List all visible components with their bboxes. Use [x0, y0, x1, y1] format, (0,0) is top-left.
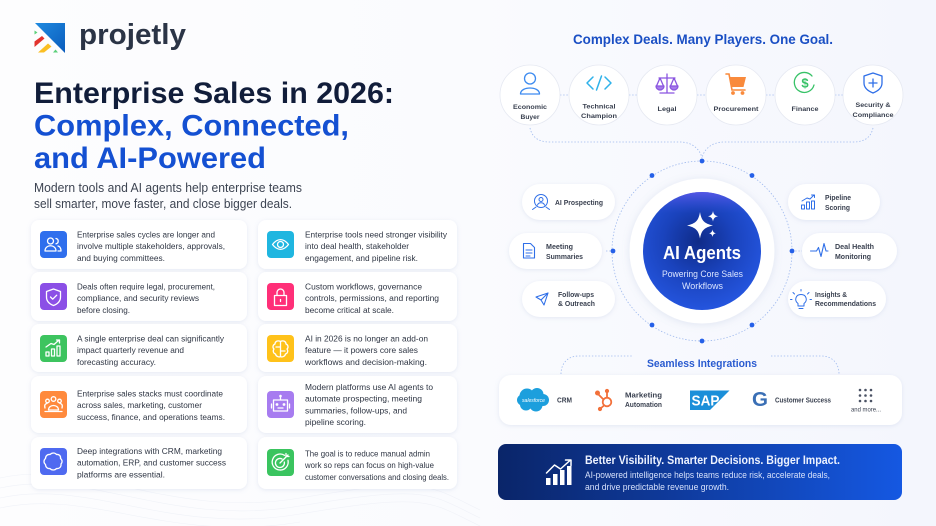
icon: shield plus	[864, 73, 882, 93]
card: integrations: Deep integrations with CRM, marketing	[77, 446, 222, 456]
logo: salesforce	[517, 388, 549, 412]
pill: deal health	[802, 233, 897, 269]
icon: sparkles	[687, 211, 718, 238]
card: goal: work so reps can focus on high-value	[304, 460, 434, 470]
panel: integrations: Automation	[625, 402, 662, 409]
pill: AI prospecting: AI Prospecting	[555, 200, 603, 207]
icon: document	[524, 244, 534, 258]
connector: stakeholders to AI agents	[530, 95, 873, 158]
logo: projetly: projetly	[79, 19, 186, 51]
title: Complex, Connected,	[34, 110, 349, 142]
heading: seamless integrations: Seamless Integrations	[647, 358, 757, 370]
card: sales stacks: success, finance, and operations teams.	[77, 412, 225, 422]
icon: cart	[726, 74, 746, 95]
card: legal reviews	[31, 272, 247, 321]
card: modern platforms: automate prospecting, meeting	[305, 394, 422, 404]
stakeholder: finance: Finance	[792, 106, 819, 113]
pill: follow-ups	[522, 281, 615, 317]
stakeholder: security and compliance: Security &	[856, 102, 891, 109]
banner: better visibility: and drive predictable revenue growth.	[585, 482, 729, 492]
more integrations: and more...	[851, 408, 881, 414]
icon: dollar: $	[801, 76, 809, 90]
icon: pulse	[810, 244, 828, 256]
card: AI core: feature — it powers core sales	[305, 345, 418, 355]
pill: AI prospecting	[522, 184, 615, 220]
icon: shield	[40, 283, 67, 310]
card: goal	[258, 437, 457, 489]
panel: integrations: CRM	[557, 398, 572, 404]
icon: robot	[267, 391, 294, 418]
more integrations	[851, 389, 881, 414]
pill: deal health: Deal Health	[835, 244, 874, 251]
icon: scales	[656, 74, 678, 93]
pill: pipeline scoring: Scoring	[825, 205, 850, 212]
card: deal impact: impact quarterly revenue and	[77, 345, 184, 355]
stakeholder: finance	[775, 65, 835, 125]
title: and AI-Powered	[34, 142, 266, 175]
icon: code	[587, 76, 611, 90]
logo: SAP: SAP	[692, 394, 720, 410]
hub: AI agents: AI Agents	[663, 242, 741, 263]
stakeholder: technical champion: Champion	[581, 113, 617, 120]
pill: meeting summaries: Meeting	[546, 244, 573, 251]
pill: insights: Recommendations	[815, 301, 876, 308]
card: deal impact: A single enterprise deal can significantly	[77, 334, 225, 344]
card: AI core: AI in 2026 is no longer an add-on	[305, 334, 428, 344]
card: deal impact	[31, 324, 247, 372]
stakeholder: technical champion: Technical	[582, 104, 616, 110]
icon: target	[267, 449, 294, 476]
card: legal reviews: Deals often require legal, procurement,	[77, 282, 215, 292]
card: sales cycles	[31, 220, 247, 269]
subtitle	[34, 181, 302, 211]
card: governance: Custom workflows, governance	[305, 282, 422, 292]
card: sales stacks: across sales, marketing, customer	[77, 400, 202, 410]
subtitle: Modern tools and AI agents help enterprise teams	[34, 181, 302, 195]
banner: better visibility: Better Visibility. Smarter Decisions. Bigger Impact.	[585, 455, 840, 467]
stakeholder: security and compliance	[843, 65, 903, 125]
card: AI core	[258, 324, 457, 372]
card: modern platforms: pipeline scoring.	[305, 417, 366, 427]
logo: G: G	[752, 389, 768, 411]
logo: salesforce: salesforce	[522, 398, 545, 404]
stakeholder: legal	[637, 65, 697, 125]
icon: brain	[267, 335, 294, 362]
card: sales cycles: Enterprise sales cycles are longer and	[77, 230, 215, 240]
icon: growth chart	[40, 335, 67, 362]
icon: bars	[802, 195, 814, 209]
icon: rising chart	[546, 460, 572, 485]
title: Enterprise Sales in 2026:	[34, 77, 394, 110]
subtitle: sell smarter, move faster, and close bigger deals.	[34, 197, 292, 211]
pill: insights	[788, 281, 886, 317]
icon: prospect target	[532, 194, 550, 210]
logo: SAP	[690, 390, 730, 410]
icon: stakeholders	[40, 231, 67, 258]
icon: eye	[267, 231, 294, 258]
hub: AI agents: Powering Core Sales	[662, 269, 744, 279]
panel: integrations: Customer Success	[775, 398, 831, 404]
card: sales stacks: Enterprise sales stacks must coordinate	[77, 388, 223, 398]
title	[34, 77, 394, 175]
icon: lock	[267, 283, 294, 310]
pill: deal health: Monitoring	[835, 254, 871, 261]
card: AI core: workflows and decision-making.	[304, 357, 427, 367]
stakeholder: economic buyer	[500, 65, 560, 125]
card: governance	[258, 272, 457, 321]
banner: better visibility	[498, 444, 902, 500]
hub: AI agents	[630, 178, 774, 324]
stakeholder: economic buyer: Buyer	[520, 114, 540, 121]
card: governance: controls, permissions, and reporting	[305, 293, 439, 303]
logo: projetly	[34, 19, 186, 53]
stakeholder: procurement: Procurement	[714, 106, 759, 113]
heading: complex deals: Complex Deals. Many Players. One Goal.	[573, 32, 833, 47]
pill: insights: Insights &	[815, 292, 847, 299]
card: sales cycles: involve multiple stakeholders, approvals,	[77, 241, 225, 251]
icon: team	[40, 391, 67, 418]
card: sales stacks	[31, 376, 247, 433]
icon: light bulb	[790, 290, 812, 308]
card: modern platforms: Modern platforms use AI agents to	[305, 382, 433, 392]
card: modern platforms: summaries, follow-ups, and	[305, 405, 407, 415]
panel: integrations: Marketing	[625, 392, 662, 400]
card: goal: The goal is to reduce manual admin	[305, 448, 430, 458]
stakeholder: security and compliance: Compliance	[852, 112, 894, 119]
card: goal: customer conversations and closing deals.	[305, 472, 449, 482]
stakeholder: technical champion	[569, 65, 629, 125]
logo: hubspot	[596, 390, 611, 410]
card: legal reviews: before closing.	[77, 305, 130, 315]
icon: paper plane	[536, 293, 548, 305]
banner: better visibility: AI-powered intelligence helps teams reduce risk, accelerate deals,	[585, 470, 830, 480]
card: visibility: into deal health, stakeholder	[305, 241, 409, 251]
hub: AI agents: Workflows	[682, 281, 724, 291]
pill: meeting summaries	[509, 233, 602, 269]
pill: follow-ups: Follow-ups	[558, 292, 594, 299]
orbit ring with nodes	[606, 159, 802, 343]
card: integrations	[31, 437, 247, 489]
stakeholder: procurement	[706, 65, 766, 125]
stakeholder: economic buyer: Economic	[513, 104, 547, 111]
card: visibility	[258, 220, 457, 269]
card: legal reviews: compliance, and security reviews	[77, 293, 199, 303]
pill: pipeline scoring	[788, 184, 880, 220]
card: deal impact: forecasting accuracy.	[77, 357, 156, 367]
panel: integrations	[499, 375, 902, 425]
pill: meeting summaries: Summaries	[546, 254, 583, 261]
pill: follow-ups: & Outreach	[558, 301, 595, 308]
card: integrations: platforms are essential.	[77, 469, 165, 479]
card: integrations: automation, ERP, and customer success	[77, 458, 226, 468]
connector: integrations bracket	[561, 356, 839, 374]
card: modern platforms	[258, 376, 457, 433]
stakeholder: legal: Legal	[658, 106, 677, 113]
icon: puzzle	[40, 448, 67, 475]
pill: pipeline scoring: Pipeline	[825, 195, 851, 202]
icon: person	[520, 73, 540, 94]
card: visibility: engagement, and pipeline risk.	[305, 253, 418, 263]
card: governance: become critical at scale.	[305, 305, 394, 315]
card: visibility: Enterprise tools need stronger visibility	[305, 230, 448, 240]
card: sales cycles: and buying committees.	[77, 253, 165, 263]
